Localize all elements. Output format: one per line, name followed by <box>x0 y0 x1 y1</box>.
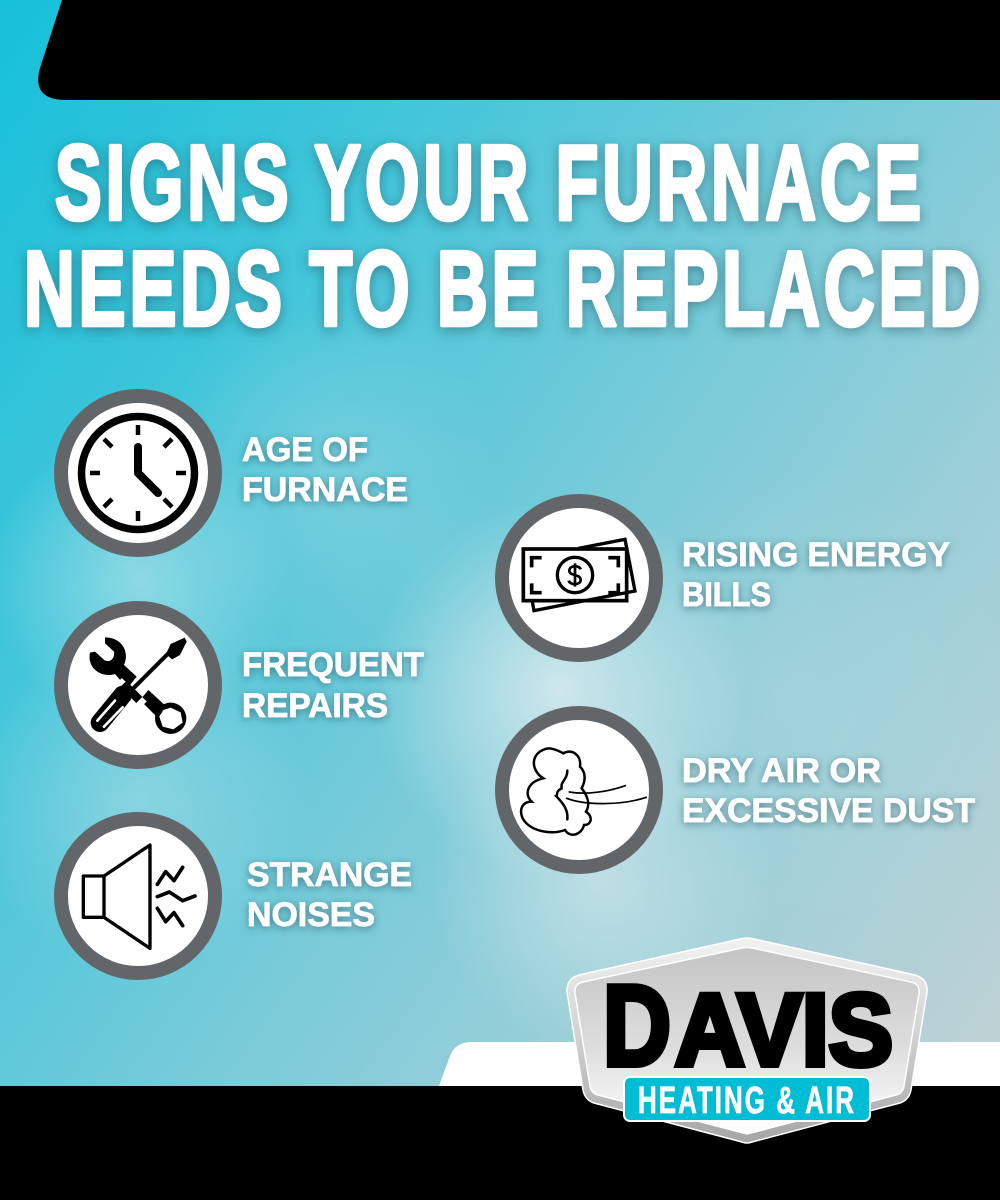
label: rising energy bills: RISING ENERGY <box>682 536 950 574</box>
item: rising energy bills <box>502 501 950 655</box>
label: strange noises <box>247 856 412 934</box>
item: strange noises <box>61 819 412 973</box>
item: age of furnace <box>61 396 408 550</box>
title <box>24 124 984 348</box>
label: dry air or excessive dust <box>682 752 975 830</box>
label: strange noises: NOISES <box>247 896 375 934</box>
bottom white strip <box>439 1042 1000 1086</box>
icon: speaker <box>61 819 215 973</box>
label: frequent repairs: FREQUENT <box>242 646 424 684</box>
label: rising energy bills: BILLS <box>682 576 771 614</box>
logo shield <box>567 938 927 1143</box>
logo wordmark: D <box>603 963 671 1090</box>
top black banner <box>38 0 1000 100</box>
label: frequent repairs <box>242 646 424 725</box>
icon: wrench and screwdriver <box>61 608 215 762</box>
logo wordmark <box>603 963 893 1090</box>
label: rising energy bills <box>682 536 950 614</box>
logo badge <box>624 1077 870 1122</box>
icon: clock <box>61 396 215 550</box>
label: age of furnace: FURNACE <box>242 471 408 509</box>
icon: money <box>502 501 656 655</box>
item: dry air or excessive dust <box>502 713 975 867</box>
label: dry air or excessive dust: DRY AIR OR <box>682 752 881 790</box>
icon: dust cloud <box>502 713 656 867</box>
label: frequent repairs: REPAIRS <box>242 687 388 725</box>
logo wordmark: AVIS <box>675 973 893 1087</box>
label: dry air or excessive dust: EXCESSIVE DUST <box>682 792 975 830</box>
label: age of furnace <box>242 431 408 509</box>
label: age of furnace: AGE OF <box>242 431 368 469</box>
logo: Davis Heating & Air <box>567 938 927 1143</box>
bottom black band <box>0 1086 1000 1200</box>
logo badge: HEATING & AIR <box>638 1080 856 1122</box>
label: strange noises: STRANGE <box>247 856 412 894</box>
item: frequent repairs <box>61 608 424 762</box>
